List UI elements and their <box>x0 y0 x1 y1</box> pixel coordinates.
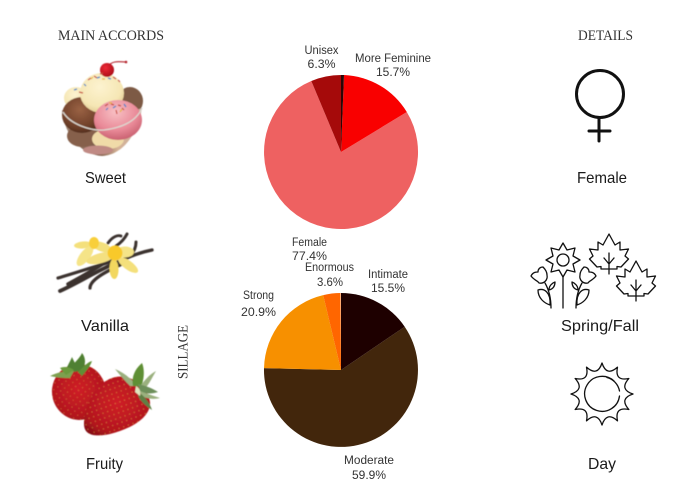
pie label: intimate <box>368 269 408 295</box>
pie label: intimate: Intimate <box>368 269 408 281</box>
pie label: enormous <box>305 262 354 289</box>
upper maple leaf <box>590 234 628 274</box>
pie label: enormous: Enormous <box>305 262 354 274</box>
pie label: female: Female <box>292 237 327 249</box>
pie label: female <box>292 237 327 263</box>
heading: details: DETAILS <box>578 28 633 44</box>
icon: sun <box>571 363 633 425</box>
pie label: strong: 20.9% <box>241 307 276 319</box>
icon: spring and fall flowers and leaves <box>531 234 656 308</box>
slice: strong 20.9% <box>264 295 341 370</box>
slice: moderate 59.9% <box>264 327 418 447</box>
photo: strawberries <box>46 353 160 435</box>
pie label: female: 77.4% <box>292 251 327 263</box>
pie label: moderate: Moderate <box>344 455 394 467</box>
label: vanilla: Vanilla <box>81 318 129 335</box>
label: spring/fall: Spring/Fall <box>561 318 639 335</box>
right tulip <box>572 267 596 308</box>
pie label: strong <box>241 290 276 319</box>
left tulip <box>531 267 555 308</box>
pie label: moderate: 59.9% <box>352 470 386 482</box>
slice: more feminine 15.7% <box>341 75 407 152</box>
pie label: unisex: 6.3% <box>308 59 336 71</box>
center flower <box>546 243 580 308</box>
label: sweet: Sweet <box>85 170 127 187</box>
pie chart: sillage <box>264 293 418 447</box>
pie label: moderate <box>344 455 394 482</box>
pie label: unisex: Unisex <box>304 45 339 57</box>
pie label: enormous: 3.6% <box>317 277 343 289</box>
icon: female symbol <box>576 70 624 141</box>
heading: main accords: MAIN ACCORDS <box>58 28 164 44</box>
label: fruity: Fruity <box>86 456 123 473</box>
heading: sillage (rotated): SILLAGE <box>176 325 192 379</box>
pie label: intimate: 15.5% <box>371 283 405 295</box>
pie label: more feminine: More Feminine <box>355 53 431 65</box>
slice: more masculine sliver <box>341 75 344 152</box>
pie label: more feminine: 15.7% <box>376 67 410 79</box>
lower maple leaf <box>616 261 656 301</box>
slice: intimate 15.5% <box>341 293 405 370</box>
photo: vanilla flowers and pods <box>58 234 152 291</box>
label: female: Female <box>577 170 627 187</box>
pie label: unisex <box>304 45 339 71</box>
photo: ice cream sundae <box>62 61 143 156</box>
pie chart: gender <box>264 75 418 229</box>
label: day: Day <box>588 456 616 473</box>
pie label: strong: Strong <box>243 290 274 302</box>
slice: unisex 6.3% <box>311 75 341 152</box>
slice: female 77.4% <box>264 81 418 229</box>
pie label: more feminine <box>355 53 431 79</box>
slice: enormous 3.6% <box>323 293 341 370</box>
